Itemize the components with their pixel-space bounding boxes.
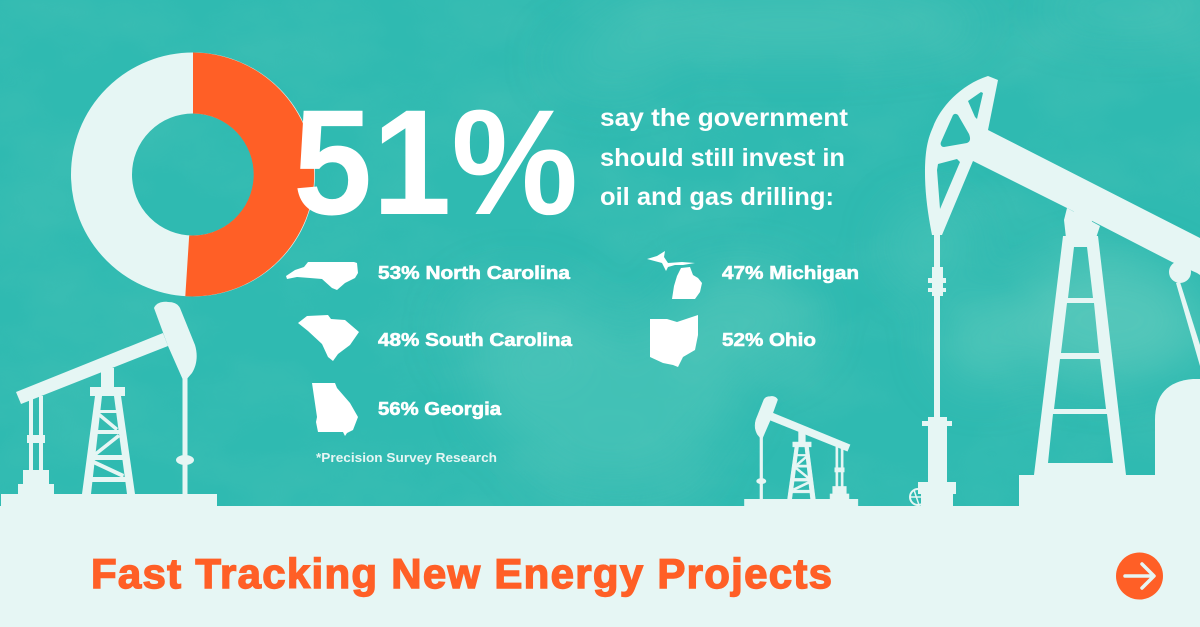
label: Georgia: 56% Georgia bbox=[378, 398, 502, 419]
left pumpjack bbox=[1, 302, 217, 507]
headline: Fast Tracking New Energy Projects bbox=[91, 550, 832, 597]
icon: Michigan bbox=[647, 251, 702, 299]
statement text bbox=[600, 104, 849, 211]
statement text: should still invest in bbox=[600, 144, 845, 172]
icon: Ohio bbox=[650, 315, 698, 367]
icon: North Carolina bbox=[286, 262, 358, 290]
icon: arrow button bbox=[1116, 552, 1163, 600]
label: North Carolina: 53% North Carolina bbox=[378, 262, 571, 283]
footnote: *Precision Survey Research bbox=[316, 450, 497, 465]
ground band bbox=[0, 506, 1200, 627]
donut chart: 51% bbox=[102, 52, 314, 296]
statement text: say the government bbox=[600, 104, 849, 132]
statement text: oil and gas drilling: bbox=[600, 183, 834, 211]
big statistic: 51% bbox=[293, 78, 578, 246]
label: South Carolina: 48% South Carolina bbox=[378, 329, 573, 350]
icon: South Carolina bbox=[298, 315, 359, 361]
middle pumpjack bbox=[744, 396, 858, 506]
icon: Georgia bbox=[312, 383, 358, 436]
label: Ohio: 52% Ohio bbox=[722, 329, 816, 350]
right pumpjack bbox=[910, 76, 1200, 507]
label: Michigan: 47% Michigan bbox=[722, 262, 859, 283]
